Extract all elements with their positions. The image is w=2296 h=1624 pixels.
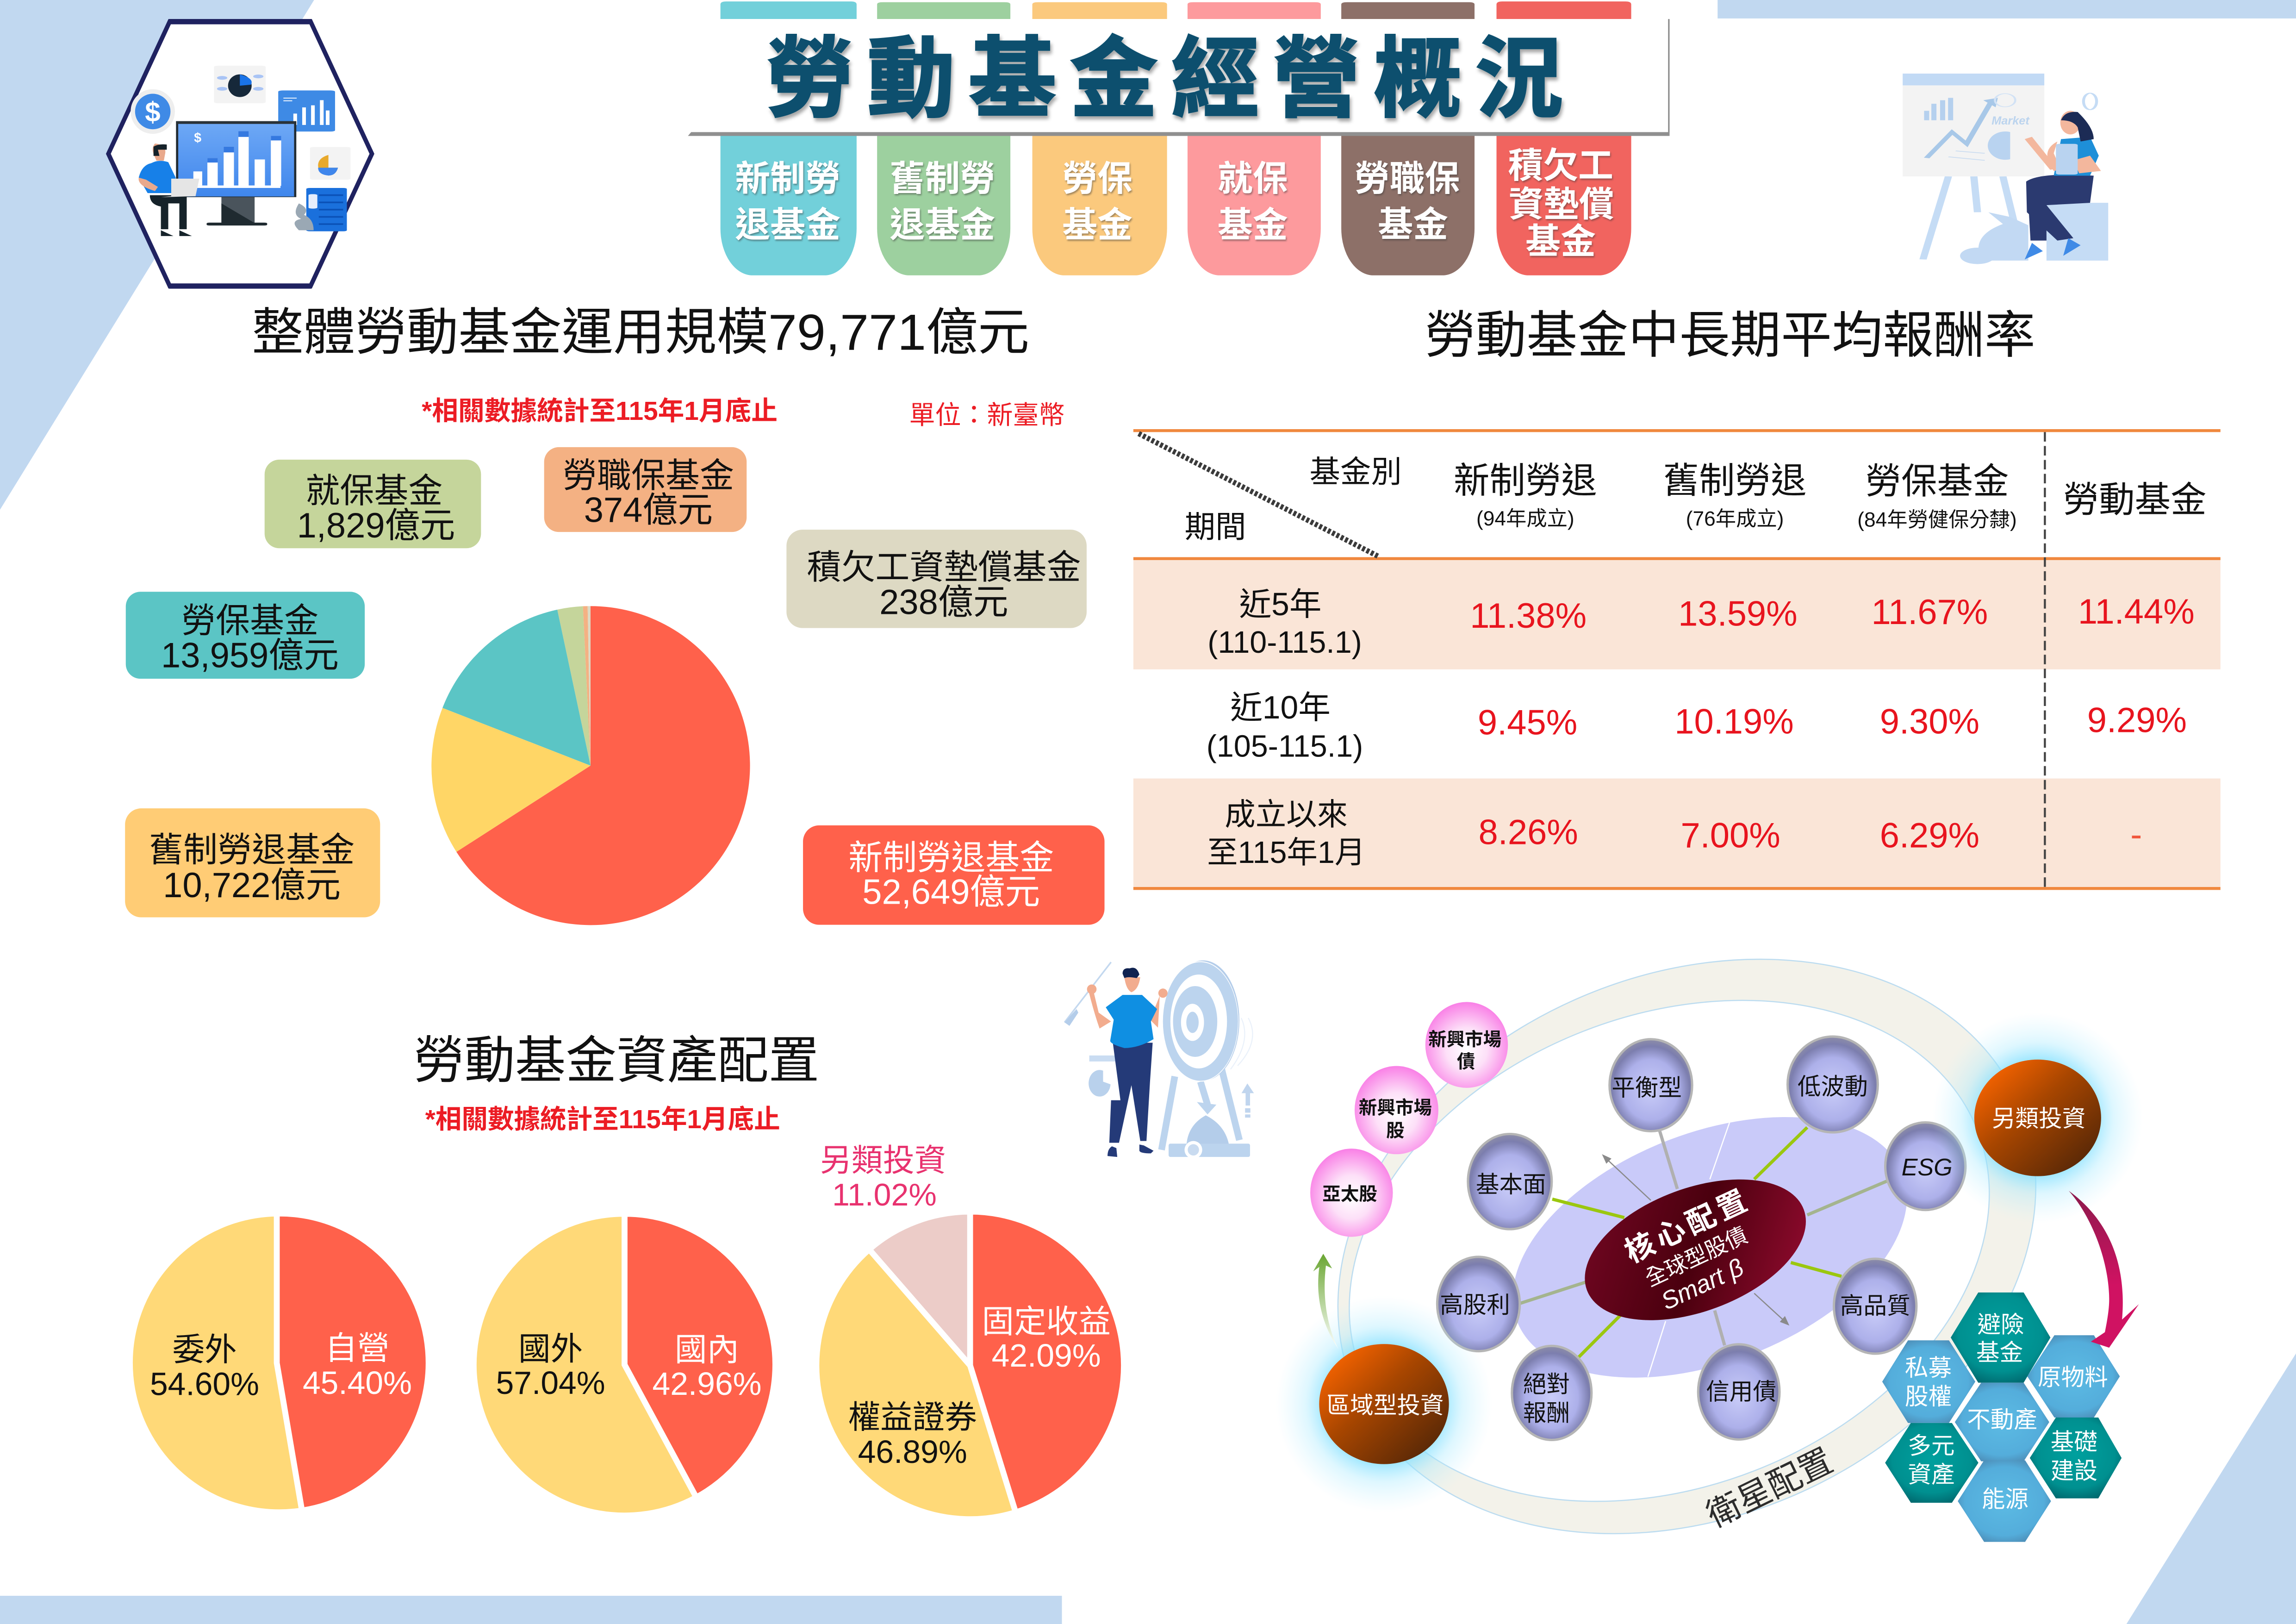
hex: 不動產: 不動產 [1967, 1406, 2037, 1433]
hexagon badge with analytics illustration: $ [145, 97, 161, 128]
label box: 勞保基金: 13,959億元 [161, 636, 339, 675]
connectors [1512, 1127, 1887, 1359]
sphere: 平衡型: 平衡型 [1612, 1074, 1682, 1101]
hex: 原物料 [2027, 1335, 2120, 1418]
pink sphere: 亞太股 [1310, 1149, 1393, 1237]
label box: 新制勞退基金: 52,649億元 [862, 872, 1040, 912]
fund tab: 舊制勞退基金 [877, 132, 1010, 275]
pie chart: fund size shares [431, 606, 750, 925]
sphere: 信用債 [1698, 1344, 1780, 1439]
pie chart: asset classes: 42.09% [992, 1337, 1101, 1374]
label box: 勞保基金 [126, 592, 365, 679]
sphere: 高股利 [1437, 1257, 1520, 1351]
fund tab: 勞職保基金: 勞職保 [1355, 159, 1460, 199]
label box: 積欠工資墊償基金: 積欠工資墊償基金 [807, 548, 1081, 587]
table return values: 7.00% [1680, 816, 1780, 855]
satellite ring [1247, 854, 2126, 1624]
table return values: - [2130, 815, 2142, 855]
orange sphere: 區域型投資 [1276, 1296, 1493, 1512]
note: data date: *相關數據統計至115年1月底止 [422, 396, 778, 426]
label box: 勞職保基金 [544, 447, 747, 532]
callout: 另類投資: 11.02% [832, 1177, 937, 1212]
label box: 勞職保基金: 374億元 [584, 491, 713, 530]
callout: 另類投資: 另類投資 [820, 1143, 946, 1178]
fund tab: 舊制勞退基金: 舊制勞 [890, 159, 995, 199]
pie chart: asset classes: 固定收益 [982, 1304, 1111, 1340]
pink sphere: 新興市場股: 股 [1386, 1121, 1405, 1141]
table header cells: 勞保基金 [1866, 462, 2009, 501]
table header cells: 新制勞退 [1454, 461, 1597, 501]
title banner [688, 19, 1669, 136]
fund tab: 就保基金: 就保 [1218, 159, 1288, 199]
hex: 多元資產: 資產 [1908, 1461, 1954, 1487]
table row labels: 至115年1月 [1207, 836, 1365, 870]
fund tab: 勞保基金: 勞保 [1062, 159, 1132, 199]
background: bottom-left blue bar [0, 1596, 1062, 1624]
label: 衛星配置: 衛星配置 [1701, 1442, 1838, 1535]
fund tab: 新制勞退基金 [721, 132, 857, 275]
pie chart: asset classes [816, 1212, 1124, 1519]
sphere: 信用債: 信用債 [1706, 1379, 1776, 1405]
fund tab: 新制勞退基金: 退基金 [735, 206, 840, 245]
label box: 就保基金 [265, 460, 481, 548]
hex: 多元資產 [1885, 1423, 1979, 1503]
orange sphere: 另類投資 [1932, 1012, 2143, 1223]
pie chart: 國內 vs 國外: 國內 [675, 1331, 739, 1368]
illustration: man with target [1064, 960, 1254, 1159]
market label on board: Market [1991, 114, 2030, 127]
pie chart: 自營 vs 委外: 54.60% [150, 1366, 259, 1402]
hex: 能源 [1958, 1460, 2051, 1542]
sphere: 絕對報酬 [1512, 1346, 1592, 1440]
heading: total fund size: 整體勞動基金運用規模79,771億元 [252, 305, 1029, 361]
sphere: 高股利: 高股利 [1440, 1292, 1510, 1318]
core ellipse: 全球型股債 [1641, 1223, 1751, 1292]
hex: 避險基金 [1951, 1293, 2050, 1383]
sphere: 基本面: 基本面 [1476, 1171, 1546, 1198]
table return values: 9.30% [1880, 702, 1979, 741]
table header cells: 舊制勞退 [1663, 461, 1807, 501]
table row labels [1207, 586, 1365, 870]
label box: 就保基金: 1,829億元 [297, 506, 455, 545]
label box: 舊制勞退基金: 10,722億元 [163, 866, 341, 905]
fund tab: 積欠工資墊償基金 [1497, 132, 1631, 275]
pie chart: asset classes: 46.89% [858, 1434, 967, 1470]
label box: 積欠工資墊償基金 [786, 530, 1087, 628]
fund tab: 勞保基金: 基金 [1062, 206, 1132, 245]
sphere: ESG [1885, 1122, 1966, 1210]
pink sphere: 新興市場債: 新興市場 [1428, 1030, 1501, 1050]
fund tab: 積欠工資墊償基金: 資墊償 [1509, 185, 1614, 224]
pink sphere: 亞太股: 亞太股 [1322, 1184, 1377, 1205]
table header cells: (76年成立) [1686, 508, 1784, 531]
heading: asset allocation: 勞動基金資產配置 [414, 1033, 819, 1089]
table return values: 10.19% [1674, 702, 1794, 741]
pie chart: 國內 vs 國外: 國外 [518, 1331, 583, 1367]
table return values: 11.38% [1470, 596, 1587, 636]
hexagon badge with analytics illustration [108, 19, 372, 289]
table header cells: (94年成立) [1476, 507, 1574, 530]
table header cells [1185, 455, 2207, 544]
pie chart: asset classes: 權益證券 [848, 1399, 977, 1435]
fund tab: 就保基金: 基金 [1218, 206, 1288, 245]
table header cells: 勞動基金 [2063, 480, 2207, 520]
hex: 私募股權: 私募 [1905, 1355, 1952, 1381]
label box: 新制勞退基金: 新制勞退基金 [848, 838, 1054, 877]
pie chart: 自營 vs 委外: 委外 [172, 1331, 237, 1368]
table return values [1470, 592, 2195, 855]
pie chart: 自營 vs 委外: 自營 [325, 1330, 390, 1366]
table row labels: (110-115.1) [1207, 625, 1362, 660]
fund tab: 積欠工資墊償基金: 積欠工 [1508, 146, 1613, 186]
sphere: 絕對報酬: 絕對 [1523, 1371, 1570, 1397]
sphere: 高品質 [1834, 1259, 1916, 1354]
title banner: 勞動基金經營概況 [766, 30, 1563, 128]
label box: 新制勞退基金 [803, 825, 1105, 925]
sphere: 基本面 [1468, 1134, 1552, 1229]
sphere: 高品質: 高品質 [1840, 1293, 1910, 1319]
hex: 多元資產: 多元 [1908, 1432, 1954, 1459]
note: unit: 單位：新臺幣 [909, 400, 1064, 430]
label box: 就保基金: 就保基金 [305, 472, 442, 510]
hex: 基礎建設 [2030, 1418, 2122, 1499]
sphere: 低波動 [1787, 1037, 1878, 1132]
hex: 避險基金: 避險 [1978, 1312, 2024, 1338]
table return values: 11.67% [1871, 593, 1988, 632]
pie chart: 自營 vs 委外: 45.40% [303, 1365, 412, 1401]
core lavender disc [1476, 1066, 1944, 1429]
background: top-left blue wedge [0, 0, 314, 510]
fund tab: 積欠工資墊償基金: 基金 [1525, 222, 1596, 262]
pie chart: 自營 vs 委外 [130, 1213, 429, 1512]
pink sphere: 新興市場債 [1425, 1002, 1508, 1088]
sphere: 平衡型 [1610, 1039, 1692, 1131]
table return values: 6.29% [1880, 816, 1979, 855]
fund tab: 就保基金 [1188, 132, 1321, 275]
table row labels: 成立以來 [1225, 798, 1348, 832]
table row labels: 近10年 [1230, 689, 1331, 725]
hex: 避險基金: 基金 [1976, 1339, 2023, 1366]
pink sphere: 新興市場股: 新興市場 [1359, 1098, 1432, 1118]
fund tab: 勞職保基金 [1341, 132, 1475, 275]
table return values: 13.59% [1678, 594, 1798, 634]
fund tab: 勞職保基金: 基金 [1378, 205, 1448, 244]
pie chart: 國內 vs 國外: 42.96% [653, 1366, 762, 1402]
arrow: magenta curve [2069, 1191, 2139, 1348]
sphere: 絕對報酬: 報酬 [1523, 1399, 1570, 1426]
table return values: 11.44% [2078, 592, 2195, 631]
hex: 基礎建設: 建設 [2051, 1457, 2097, 1484]
pink sphere: 新興市場債: 債 [1457, 1052, 1475, 1072]
sphere: ESG: ESG [1902, 1154, 1953, 1181]
hex: 能源: 能源 [1982, 1486, 2028, 1512]
fund tab: 新制勞退基金: 新制勞 [735, 159, 840, 199]
hexagon badge with analytics illustration: $ [194, 131, 201, 145]
table row labels: 近5年 [1239, 586, 1321, 622]
fund tab: 舊制勞退基金: 退基金 [890, 206, 995, 245]
core ellipse: Smart β [1657, 1253, 1748, 1315]
hexagon cluster: alternative assets [1882, 1293, 2122, 1542]
pie chart: 國內 vs 國外 [474, 1214, 775, 1516]
table header cells: (84年勞健保分隸) [1857, 508, 2017, 531]
label box: 積欠工資墊償基金: 238億元 [879, 582, 1008, 622]
note: data date: *相關數據統計至115年1月底止 [425, 1105, 780, 1134]
fund tab: 勞保基金 [1033, 132, 1167, 275]
callout: 另類投資 [820, 1143, 946, 1212]
background: bottom-right blue triangle [2127, 1353, 2296, 1624]
table return values: 8.26% [1479, 813, 1578, 852]
core ellipse: 核心配置 [1620, 1183, 1756, 1269]
heading: long-term returns: 勞動基金中長期平均報酬率 [1425, 307, 2035, 364]
top colored tabs [721, 1, 1631, 19]
hex: 不動產 [1955, 1383, 2049, 1462]
core ellipse [1566, 1152, 1825, 1348]
hex: 私募股權 [1882, 1340, 1975, 1423]
table return values: 9.45% [1478, 703, 1577, 742]
table return values: 9.29% [2087, 700, 2187, 740]
sphere: 低波動: 低波動 [1798, 1074, 1868, 1100]
illustration: woman presenting market chart [1903, 74, 2108, 264]
background: top-right blue bar [1717, 0, 2296, 19]
hex: 基礎建設: 基礎 [2051, 1429, 2097, 1455]
hex: 原物料: 原物料 [2038, 1364, 2108, 1391]
label box: 勞保基金: 勞保基金 [181, 601, 318, 640]
pie chart: 國內 vs 國外: 57.04% [496, 1365, 605, 1401]
returns table [1133, 431, 2221, 888]
table header cells: 期間 [1185, 510, 1246, 544]
label box: 舊制勞退基金: 舊制勞退基金 [149, 831, 355, 869]
label box: 勞職保基金: 勞職保基金 [563, 456, 734, 495]
diagram: core-satellite allocation [1247, 854, 2143, 1624]
table row labels: (105-115.1) [1207, 729, 1363, 763]
label box: 舊制勞退基金 [125, 808, 380, 918]
orange sphere: 區域型投資: 區域型投資 [1327, 1392, 1444, 1418]
arrow: green curve [1313, 1254, 1338, 1349]
pink sphere: 新興市場股 [1355, 1066, 1438, 1154]
table header cells: 基金別 [1309, 455, 1402, 489]
orange sphere: 另類投資: 另類投資 [1992, 1106, 2085, 1132]
hex: 私募股權: 股權 [1905, 1383, 1952, 1410]
